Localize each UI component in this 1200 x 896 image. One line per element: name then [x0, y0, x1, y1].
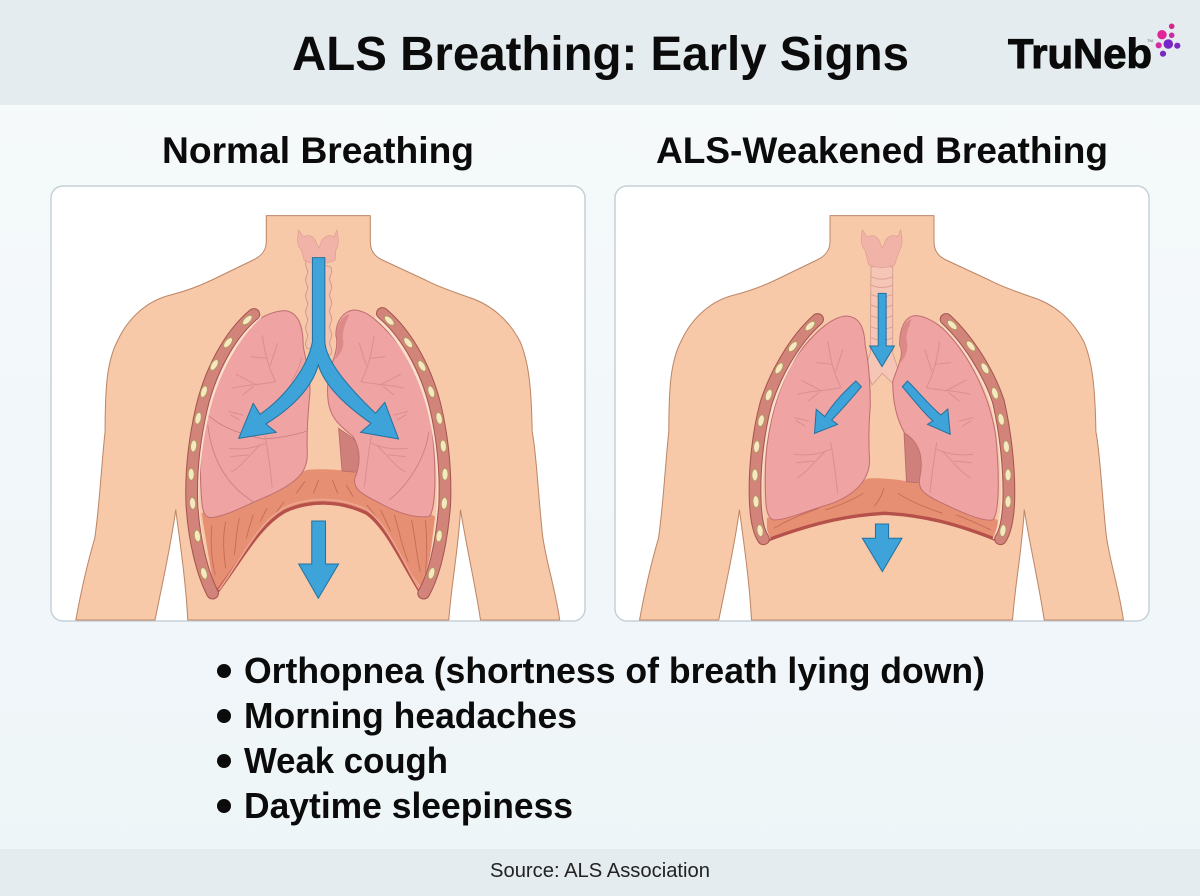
heading: normal breathing: Normal Breathing: [162, 130, 474, 171]
left lung: [765, 316, 870, 520]
right lung: [328, 310, 435, 517]
torso: [76, 216, 560, 620]
heading: ALS-weakened breathing: ALS-Weakened Breathing: [656, 130, 1108, 171]
torso: [640, 216, 1123, 620]
rib wall: left: [188, 314, 261, 593]
arrow: airflow into both lungs: [239, 258, 399, 439]
logo: TruNeb: TM: [1147, 38, 1153, 43]
panel: ALS-weakened breathing: [615, 186, 1149, 621]
rib wall: right: [939, 319, 1011, 539]
heart shadow: [904, 433, 923, 483]
diaphragm muscle: [202, 469, 435, 597]
trachea: [298, 230, 338, 355]
bullet: weak cough: Weak cough: [244, 740, 448, 781]
footer band: [0, 849, 1200, 896]
arrow: weak airflow into left lung: [815, 381, 861, 433]
bullet: orthopnea: Orthopnea (shortness of breath lying down): [244, 650, 985, 691]
rib wall: right: [375, 313, 448, 593]
diaphragm muscle: [767, 478, 998, 542]
right lung: [893, 316, 998, 520]
arrow: diaphragm moves down slightly: [862, 524, 902, 572]
title: ALS Breathing: Early Signs: [292, 28, 909, 81]
bullet: morning headaches: Morning headaches: [244, 695, 577, 736]
header band: [0, 0, 1200, 105]
trachea: [861, 230, 902, 385]
heart shadow: [339, 428, 360, 472]
logo: TruNeb: TruNeb: [1008, 30, 1152, 77]
arrow: weak airflow into right lung: [902, 381, 950, 434]
panel: normal breathing: [51, 186, 585, 621]
source line: Source: ALS Association: [490, 860, 710, 882]
arrow: diaphragm moves down: [299, 521, 339, 598]
rib wall: left: [752, 319, 823, 539]
left lung: [200, 311, 310, 518]
bullet: daytime sleepiness: Daytime sleepiness: [244, 785, 573, 826]
symptom list: [217, 650, 985, 826]
arrow: weak airflow down trachea: [870, 293, 894, 367]
